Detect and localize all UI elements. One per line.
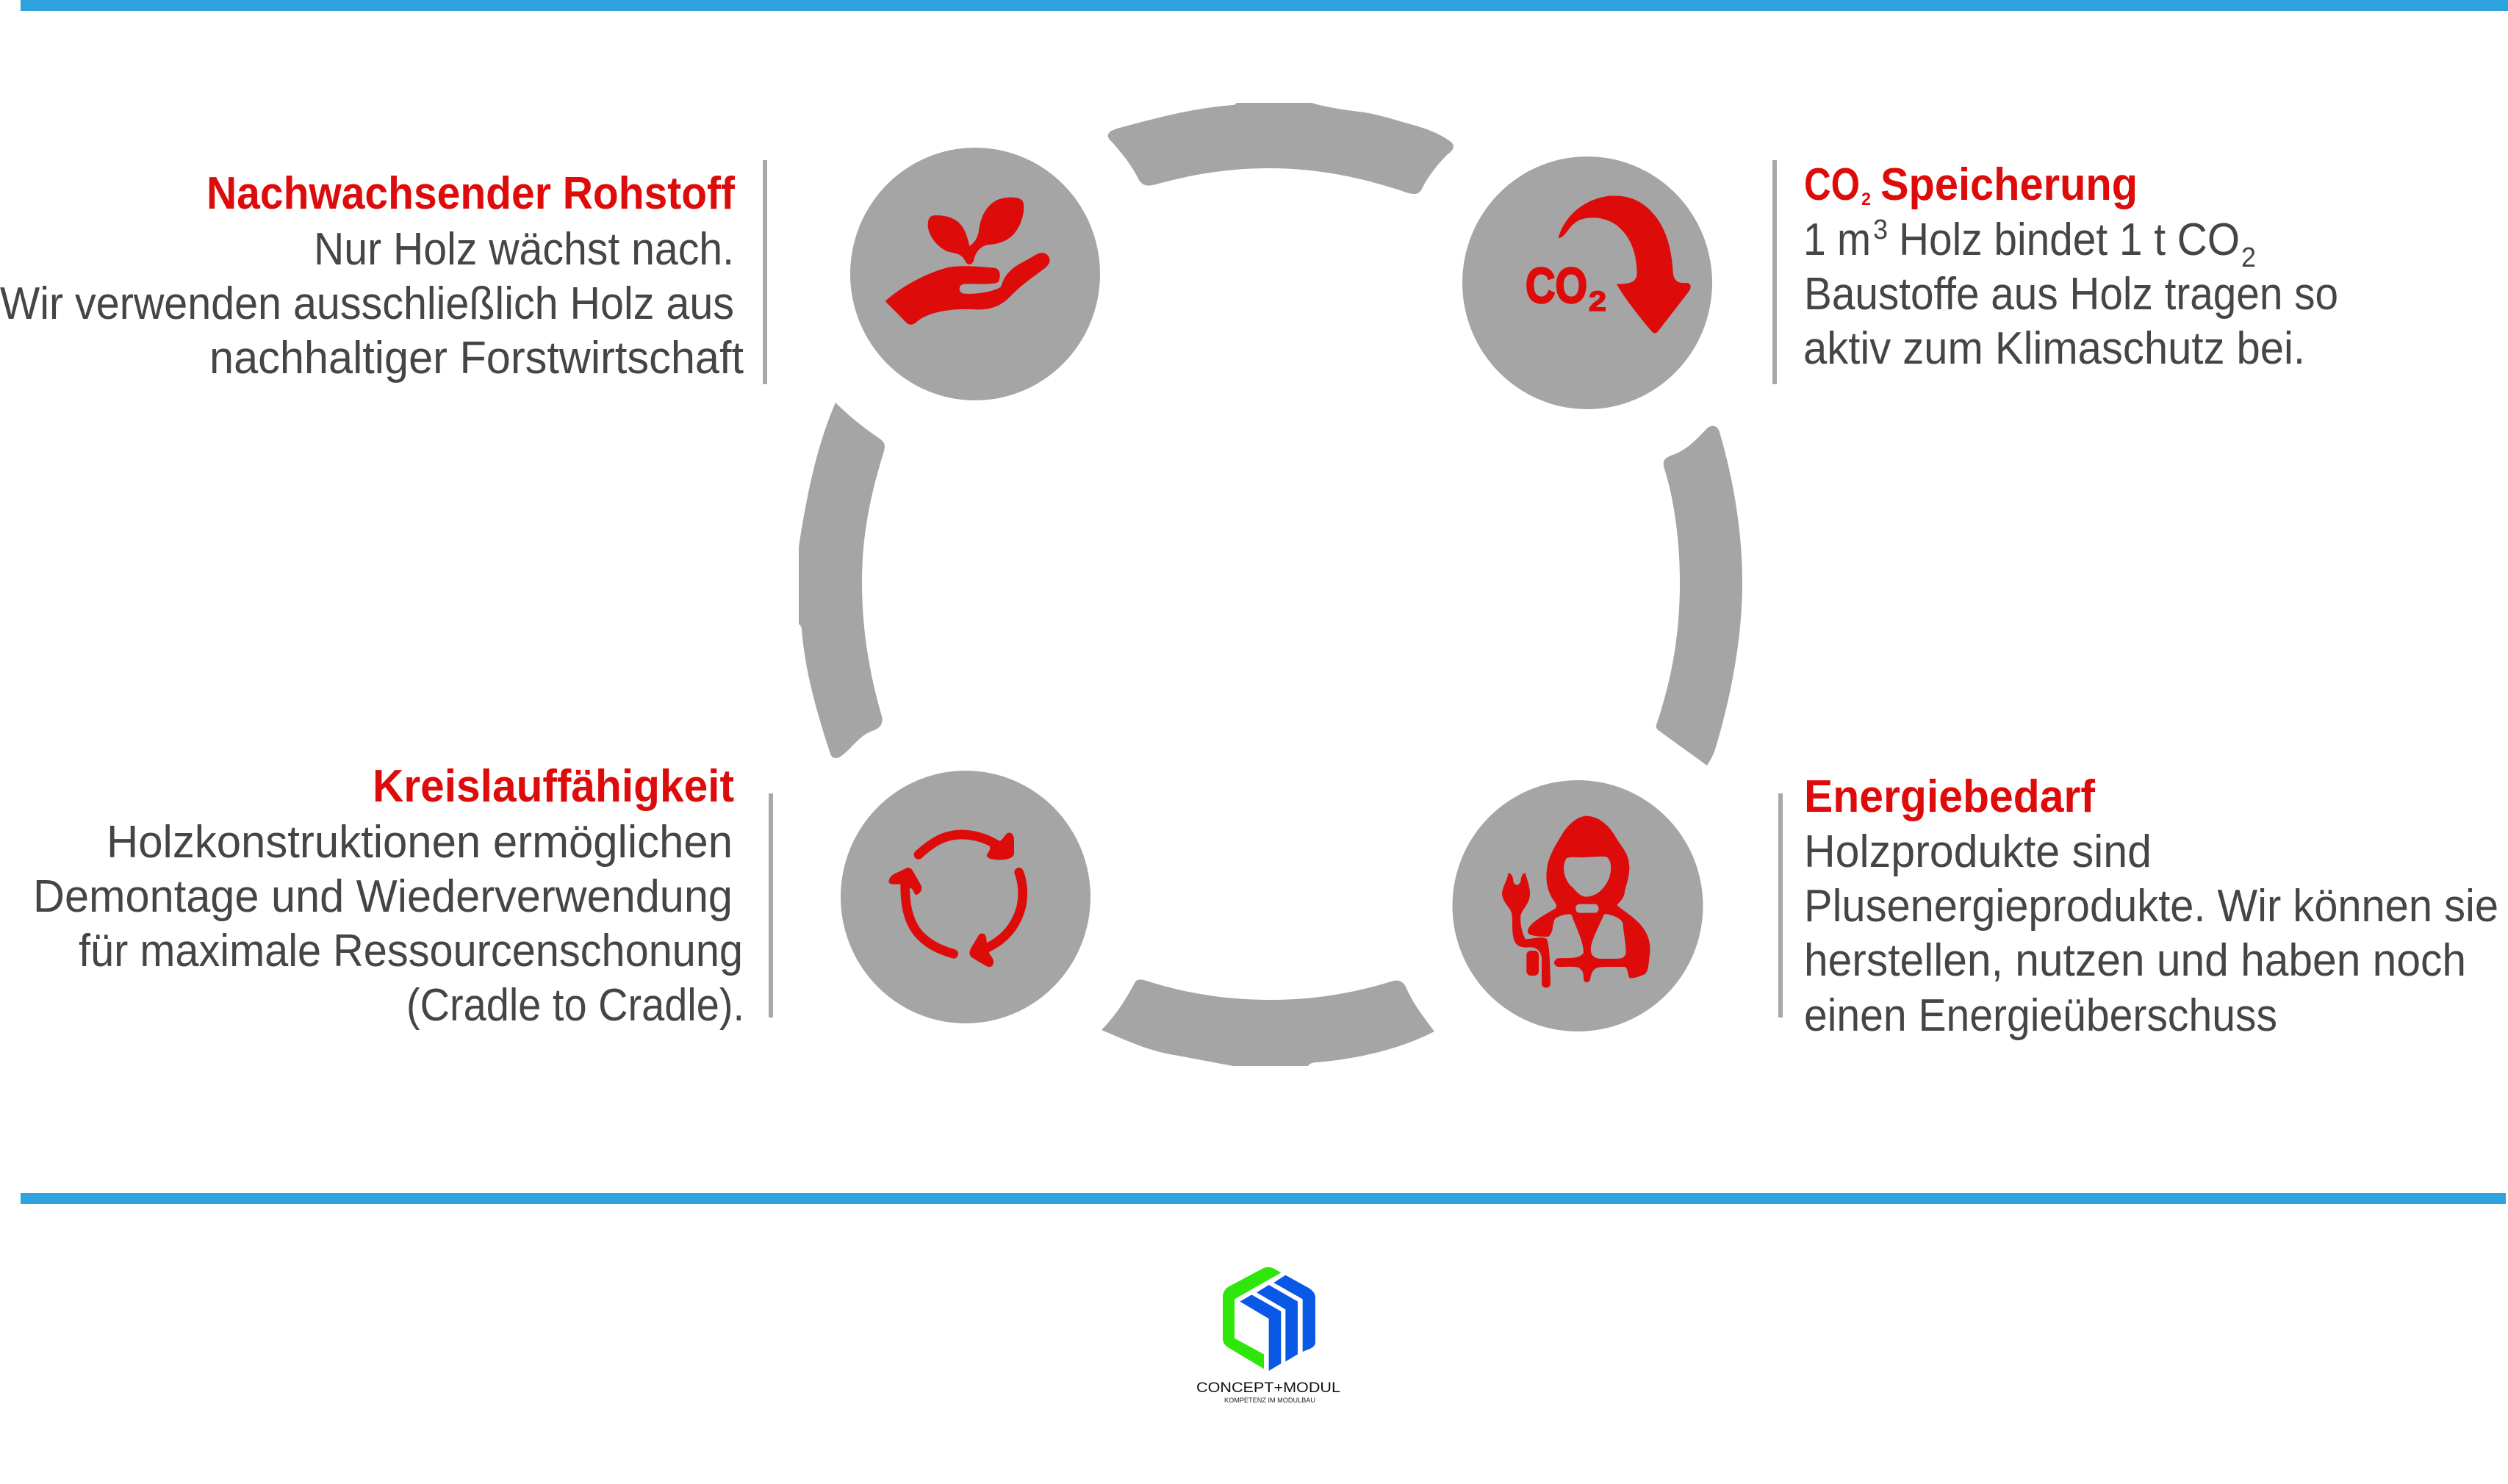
heading: Nachwachsender Rohstoff bbox=[206, 168, 735, 219]
body text bbox=[0, 224, 744, 383]
divider bar left bottom bbox=[769, 793, 773, 1017]
divider bar left top bbox=[763, 160, 767, 384]
body text: 3 bbox=[1873, 215, 1888, 245]
heading: Energiebedarf bbox=[1804, 771, 2095, 822]
body text: 2 bbox=[2241, 242, 2256, 273]
body text bbox=[33, 817, 744, 1031]
body text: Nur Holz wächst nach. bbox=[314, 224, 734, 275]
heading: CO bbox=[1804, 159, 1860, 210]
divider bar right top bbox=[1772, 160, 1777, 384]
body text: Wir verwenden ausschließlich Holz aus bbox=[0, 278, 734, 329]
arc: bottom connector bbox=[1102, 979, 1434, 1066]
icon: circular arrows bbox=[841, 771, 1090, 1023]
body text bbox=[1803, 215, 2338, 374]
panel: Energiebedarf bbox=[1778, 771, 2498, 1041]
icon: CO2 arrow: CO bbox=[1526, 258, 1587, 314]
body text: nachhaltiger Forstwirtschaft bbox=[209, 333, 744, 383]
arc: left connector bbox=[799, 403, 885, 758]
panel: Nachwachsender Rohstoff bbox=[0, 160, 767, 384]
body text: (Cradle to Cradle). bbox=[406, 980, 744, 1031]
icon: CO2 arrow: 2 bbox=[1589, 287, 1606, 317]
panel: Kreislauffähigkeit bbox=[33, 761, 773, 1031]
body text: Demontage und Wiederverwendung bbox=[33, 871, 733, 922]
body text: herstellen, nutzen und haben noch bbox=[1804, 935, 2466, 986]
body text: für maximale Ressourcenschonung bbox=[79, 926, 743, 976]
icon: person with power plug bbox=[1452, 780, 1703, 1031]
heading: 2 bbox=[1861, 190, 1871, 209]
logo: Concept+Modul: KOMPETENZ IM MODULBAU bbox=[1224, 1397, 1315, 1405]
body text: aktiv zum Klimaschutz bei. bbox=[1803, 323, 2305, 374]
body text: einen Energieüberschuss bbox=[1804, 990, 2277, 1041]
heading: Speicherung bbox=[1880, 159, 2138, 210]
icon: hand with sprout bbox=[850, 148, 1100, 400]
divider bar right bottom bbox=[1778, 793, 1783, 1017]
heading: Kreislauffähigkeit bbox=[373, 761, 734, 812]
body text bbox=[1804, 826, 2498, 1041]
logo: Concept+Modul: CONCEPT+MODUL bbox=[1196, 1380, 1340, 1396]
logo: Concept+Modul bbox=[1196, 1267, 1340, 1405]
body text: Baustoffe aus Holz tragen so bbox=[1804, 269, 2338, 320]
panel: CO2 Speicherung bbox=[1772, 159, 2338, 384]
arc: top connector bbox=[1108, 103, 1454, 194]
arc: right connector bbox=[1656, 426, 1742, 766]
body text: Holzprodukte sind bbox=[1804, 826, 2152, 877]
icon: CO2 arrow bbox=[1462, 156, 1712, 409]
body text: 1 m bbox=[1803, 215, 1871, 265]
body text: Holz bindet 1 t CO bbox=[1899, 215, 2240, 265]
body text: Holzkonstruktionen ermöglichen bbox=[107, 817, 733, 868]
